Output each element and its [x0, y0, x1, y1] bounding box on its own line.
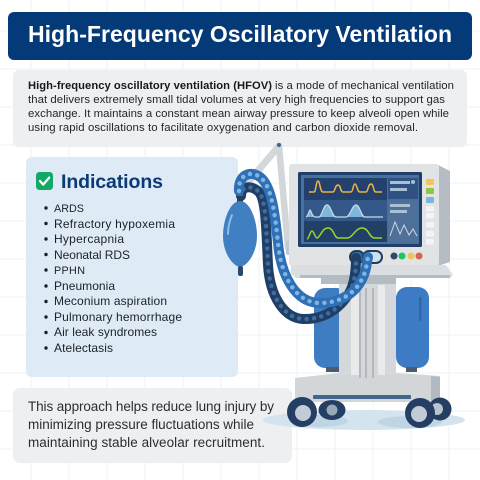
panel: definition: using rapid oscillations to facilitate oxygenation and carbon dioxide removal. [28, 122, 418, 134]
list of indications: Neonatal RDS [54, 248, 130, 262]
illustration: ventilator [223, 143, 465, 430]
monitor housing [289, 164, 453, 278]
panel: summary note: This approach helps reduce lung injury by [28, 399, 274, 414]
list of indications: Atelectasis [54, 341, 113, 355]
title banner [8, 12, 472, 60]
wheels [287, 397, 452, 428]
cart base [295, 373, 440, 402]
gas tank: right [396, 287, 429, 372]
title banner: High-Frequency Oscillatory Ventilation [28, 21, 452, 47]
support arm [245, 143, 292, 255]
list of indications [44, 203, 182, 355]
list of indications: Pneumonia [54, 279, 115, 293]
panel: definition: that delivers extremely small tidal volumes at very high frequencies to support gas [28, 94, 445, 106]
gas tank: left [314, 288, 348, 372]
breathing tube: dark [241, 187, 356, 319]
tube connectors [350, 251, 382, 263]
panel: summary note: minimizing pressure fluctuations while [28, 417, 254, 432]
panel: indications [26, 157, 238, 377]
waveform: green [307, 228, 382, 239]
icon: green check [36, 172, 53, 190]
cart column [321, 278, 396, 378]
list of indications: Refractory hypoxemia [54, 217, 175, 231]
side buttons [426, 179, 434, 244]
list of indications: Meconium aspiration [54, 294, 167, 308]
list of indications: Hypercapnia [54, 232, 124, 246]
panel: definition: exchange. It maintains a constant mean airway pressure to keep alveoli open while [28, 108, 449, 120]
list of indications: PPHN [54, 265, 85, 277]
panel: definition [13, 70, 467, 147]
panel: definition: is a mode of mechanical ventilation [275, 80, 454, 92]
waveform: blue [306, 205, 383, 217]
panel: definition: High-frequency oscillatory ventilation (HFOV) [28, 80, 272, 92]
waveform: amber [309, 181, 382, 192]
list of indications: Air leak syndromes [54, 325, 157, 339]
status lights [390, 252, 422, 260]
icon: breathing bag [223, 196, 257, 276]
side chart [390, 222, 417, 236]
list of indications: ARDS [54, 203, 84, 215]
panel: summary note [13, 388, 292, 463]
breathing tube: blue [239, 174, 368, 303]
floor shadow [263, 410, 465, 430]
heading: indications: Indications [61, 171, 163, 193]
panel: summary note: maintaining stable alveolar recruitment. [28, 435, 265, 450]
list of indications: Pulmonary hemorrhage [54, 310, 182, 324]
monitor screen [298, 172, 422, 247]
side readouts [390, 180, 415, 213]
